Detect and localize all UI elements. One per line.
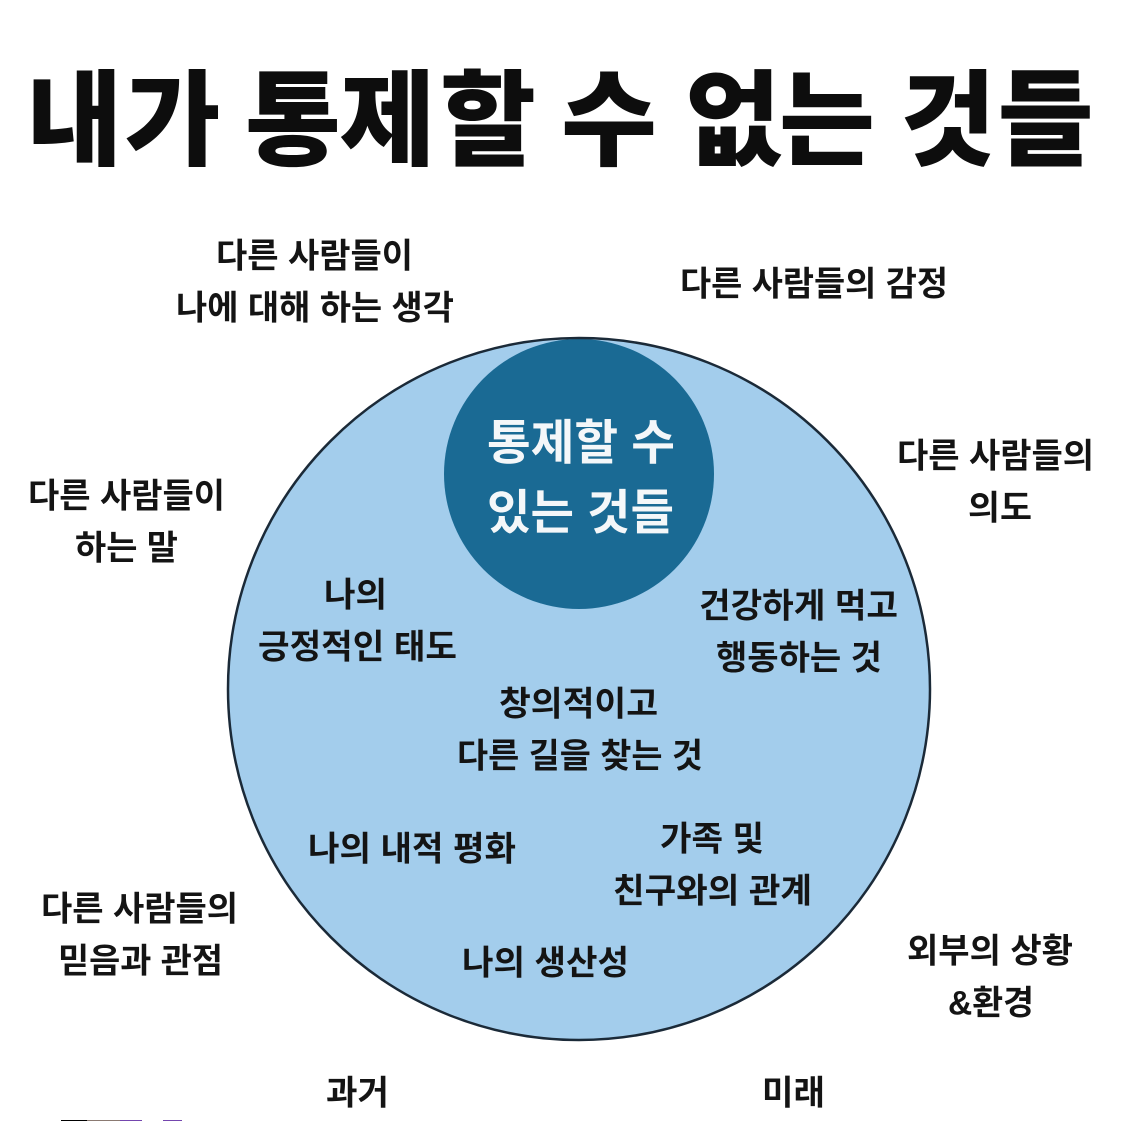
label: what others say (28, 478, 225, 568)
label: family and friend relationships: 친구와의 관계 (613, 872, 812, 910)
label: others' thoughts about me: 다른 사람들이 (216, 238, 413, 276)
label: external circumstances and environment (907, 932, 1073, 1022)
title: 제 (340, 64, 435, 180)
label: external circumstances and environment: 외부의 상황 (907, 932, 1073, 970)
label: future: 미래 (762, 1074, 825, 1112)
title: 는 (779, 64, 875, 180)
label: family and friend relationships: 가족 및 (660, 820, 764, 858)
label: external circumstances and environment: &환경 (948, 984, 1034, 1022)
label: others' beliefs and views: 다른 사람들의 (41, 890, 238, 928)
label: my productivity: 나의 생산성 (462, 944, 629, 982)
title: 내 (27, 64, 122, 180)
label: being creative and finding another way: 다른 길을 찾는 것 (457, 738, 703, 776)
label: others' beliefs and views (41, 890, 238, 980)
title: 것 (900, 64, 996, 180)
label: others' emotions: 다른 사람들의 감정 (680, 266, 948, 304)
title: 가 (125, 64, 220, 180)
label: past: 과거 (326, 1074, 389, 1112)
title: 통 (245, 64, 341, 180)
label: family and friend relationships (613, 820, 812, 910)
label: others' intentions: 의도 (968, 490, 1032, 528)
label: my inner peace: 나의 내적 평화 (308, 830, 516, 868)
label: my positive attitude (258, 576, 457, 666)
label: others' intentions (897, 438, 1094, 528)
panel: inner circle of controllable things (444, 339, 714, 609)
heading: inner circle label (487, 417, 675, 540)
title: 들 (998, 64, 1093, 180)
label: others' thoughts about me (176, 238, 454, 328)
label: eating and acting healthily: 행동하는 것 (716, 640, 882, 678)
heading: inner circle label: 통제할 수 (487, 417, 675, 470)
title: 할 (440, 64, 536, 180)
label: others' beliefs and views: 믿음과 관점 (58, 942, 223, 980)
label: being creative and finding another way (457, 686, 703, 776)
panel: outer circle of things within influence (228, 338, 930, 1040)
title (27, 64, 1093, 180)
title: 수 (561, 64, 657, 180)
label: eating and acting healthily: 건강하게 먹고 (699, 588, 898, 626)
label: others' intentions: 다른 사람들의 (897, 438, 1094, 476)
label: eating and acting healthily (699, 588, 898, 678)
label: my positive attitude: 나의 (324, 576, 387, 614)
cropped image sliver at bottom edge (61, 1120, 182, 1121)
label: what others say: 하는 말 (75, 530, 178, 568)
label: being creative and finding another way: 창의적이고 (499, 686, 658, 724)
heading: inner circle label: 있는 것들 (487, 487, 674, 540)
label: my positive attitude: 긍정적인 태도 (258, 628, 457, 666)
label: what others say: 다른 사람들이 (28, 478, 225, 516)
label: others' thoughts about me: 나에 대해 하는 생각 (176, 290, 454, 328)
title: 없 (685, 64, 782, 180)
